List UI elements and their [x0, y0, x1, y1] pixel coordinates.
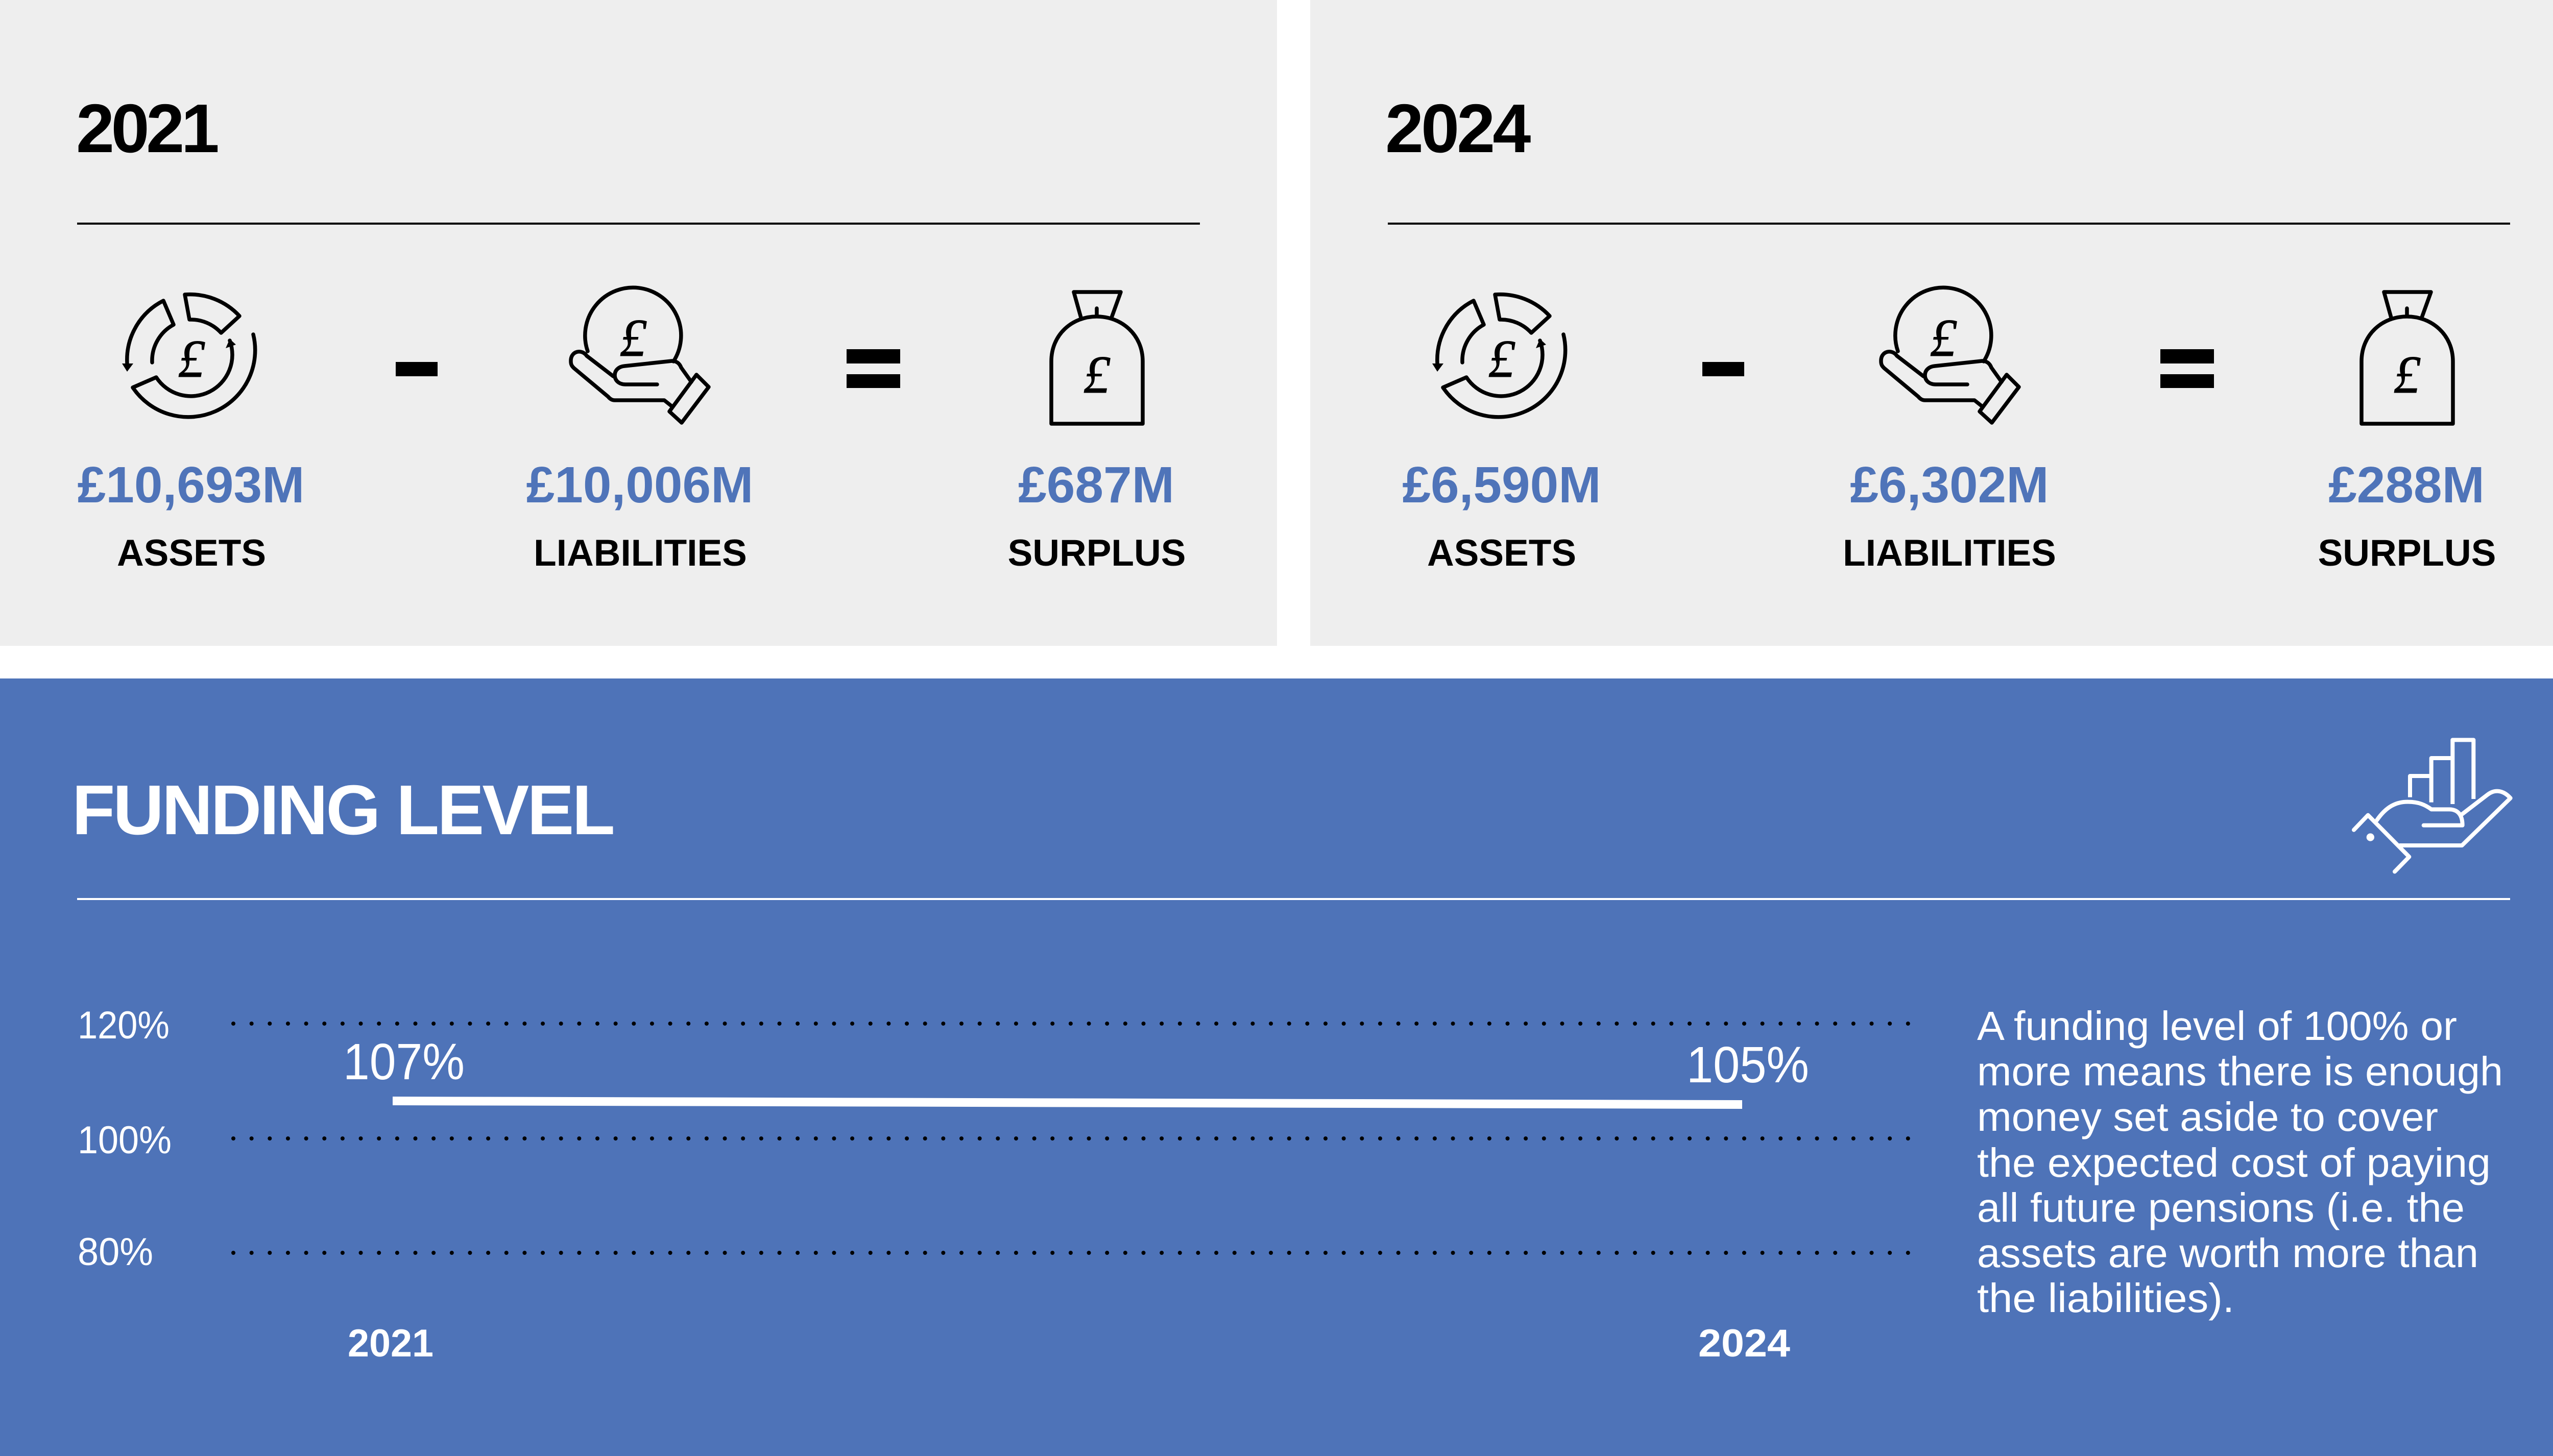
equals sign	[847, 349, 900, 388]
explanatory text: A funding level of 100% or	[1977, 1003, 2457, 1049]
icon: hand holding bar chart	[2354, 740, 2511, 871]
panel: funding level	[0, 678, 2553, 1456]
heading: 2024: 2024	[1385, 90, 1531, 167]
panel: 2021	[0, 0, 1277, 646]
heading: 2021: 2021	[76, 90, 218, 167]
value 105%: 105%	[1687, 1036, 1809, 1094]
icon: money bag	[1051, 292, 1143, 424]
icon: money bag	[2362, 292, 2453, 424]
surplus value: £687M	[1018, 456, 1174, 514]
panel: 2024	[1310, 0, 2553, 646]
assets label: ASSETS	[117, 532, 266, 574]
explanatory text: money set aside to cover	[1977, 1094, 2438, 1139]
axis label 100%: 100%	[78, 1119, 172, 1162]
year 2021: 2021	[348, 1322, 433, 1365]
liabilities value: £6,302M	[1850, 456, 2049, 514]
axis label 120%: 120%	[78, 1004, 170, 1047]
surplus label: SURPLUS	[2318, 532, 2496, 574]
assets value: £10,693M	[78, 456, 304, 514]
explanatory text: the liabilities).	[1977, 1275, 2234, 1321]
icon: hand holding coin	[1881, 287, 2019, 423]
axis label 80%: 80%	[78, 1230, 153, 1274]
funding level line	[393, 1097, 1742, 1109]
icon: hand holding coin	[571, 287, 709, 423]
icon: assets cycle	[1432, 295, 1565, 417]
surplus value: £288M	[2328, 456, 2485, 514]
icon: money bag: £	[2394, 345, 2421, 404]
minus sign	[1702, 362, 1744, 376]
explanatory text: assets are worth more than	[1977, 1230, 2478, 1276]
equals sign	[2160, 349, 2214, 388]
explanatory text	[1977, 1003, 2503, 1321]
explanatory text: the expected cost of paying	[1977, 1140, 2491, 1185]
icon: assets cycle: £	[1488, 329, 1515, 389]
liabilities value: £10,006M	[526, 456, 753, 514]
surplus label: SURPLUS	[1008, 532, 1186, 574]
icon: assets cycle	[122, 295, 255, 417]
explanatory text: all future pensions (i.e. the	[1977, 1185, 2465, 1230]
assets value: £6,590M	[1402, 456, 1601, 514]
icon: hand holding coin: £	[620, 308, 647, 368]
icon: money bag: £	[1083, 345, 1111, 404]
icon: hand holding coin: £	[1930, 308, 1957, 368]
assets label: ASSETS	[1427, 532, 1576, 574]
heading: funding level: FUNDING LEVEL	[72, 771, 613, 850]
liabilities label: LIABILITIES	[534, 532, 747, 574]
liabilities label: LIABILITIES	[1843, 532, 2056, 574]
minus sign	[396, 362, 438, 376]
icon: assets cycle: £	[178, 329, 205, 389]
line chart: funding level	[78, 1004, 1909, 1365]
value 107%: 107%	[343, 1033, 465, 1090]
explanatory text: more means there is enough	[1977, 1049, 2503, 1094]
year 2024: 2024	[1698, 1322, 1790, 1365]
